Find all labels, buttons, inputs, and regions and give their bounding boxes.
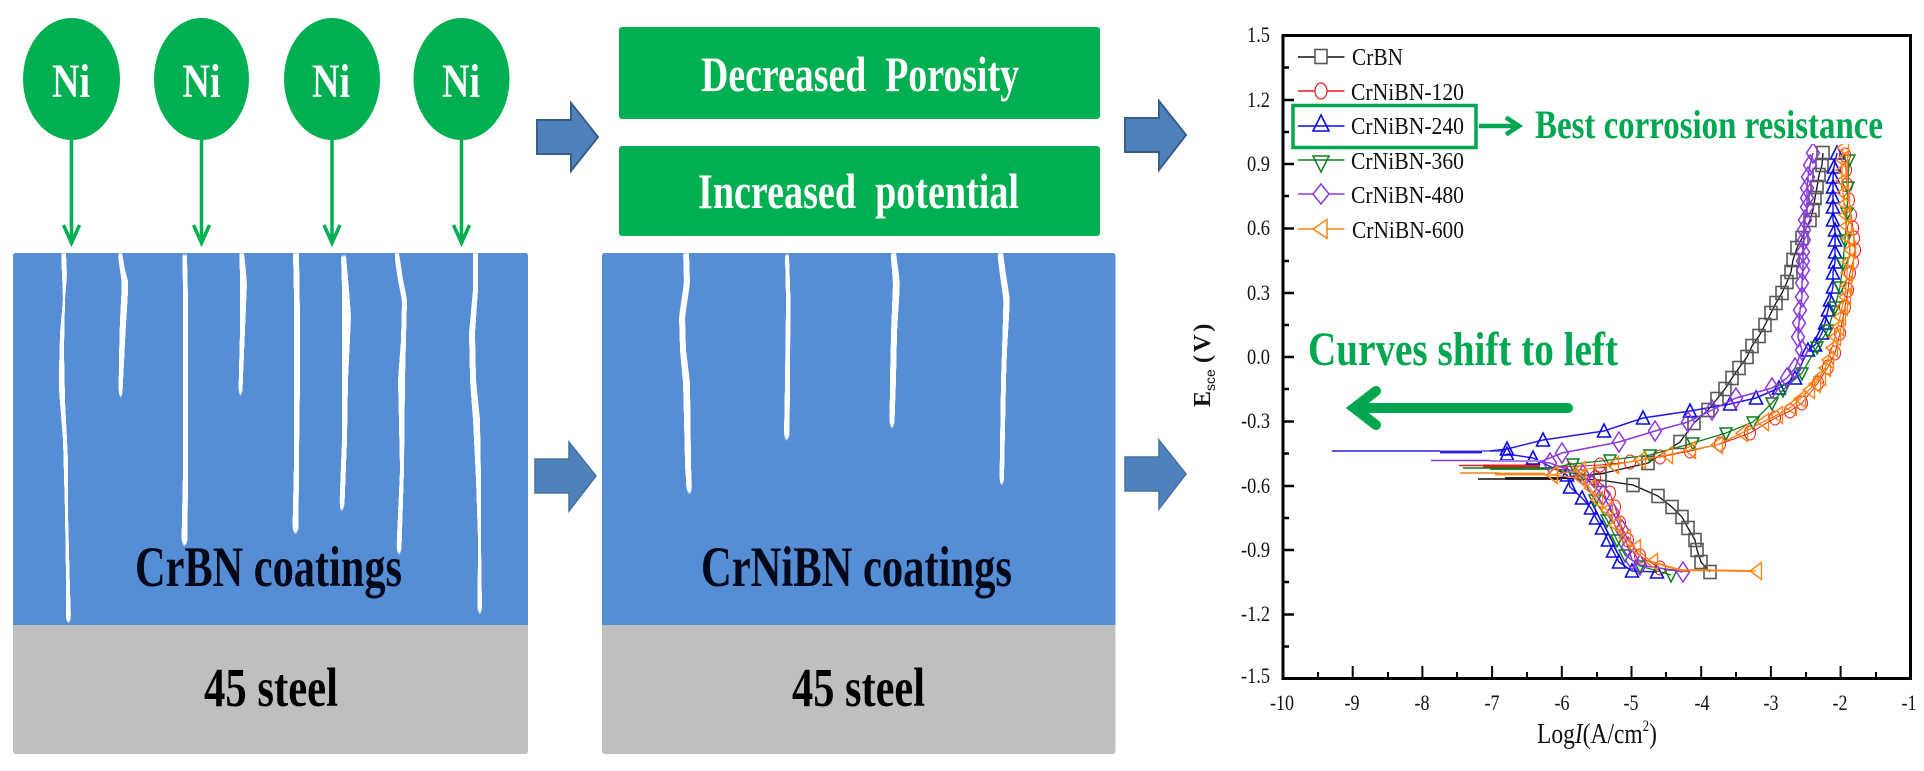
callout: curves shift to left: Curves shift to left xyxy=(1308,323,1618,376)
series: CrNiBN-120 xyxy=(1459,155,1855,572)
legend item: CrNiBN-600: CrNiBN-600 xyxy=(1352,218,1464,244)
highlight box around CrNiBN-240 xyxy=(1293,106,1476,148)
legend item: CrNiBN-360: CrNiBN-360 xyxy=(1351,149,1464,175)
y axis tick labels: -1.5 xyxy=(1241,663,1270,688)
x axis tick labels: -7 xyxy=(1484,690,1500,715)
y axis tick labels: 0.9 xyxy=(1247,151,1270,176)
arrow: Ni to decreased porosity xyxy=(537,103,598,171)
x axis tick labels: -2 xyxy=(1832,690,1848,715)
CrNiBN coating layer xyxy=(602,253,1116,625)
y axis tick labels: 0.3 xyxy=(1247,280,1270,305)
x axis title: LogI(A/cm xyxy=(1537,718,1657,750)
x axis tick labels: -6 xyxy=(1554,690,1570,715)
chart frame and ticks xyxy=(1283,36,1910,678)
y axis tick labels: 0.6 xyxy=(1247,215,1270,240)
x axis tick labels: -9 xyxy=(1344,690,1360,715)
Ni atom 1 with arrow: Ni xyxy=(52,55,90,108)
Ni atom 4 with arrow: Ni xyxy=(442,55,480,108)
x axis title: 2 xyxy=(1643,718,1649,735)
y axis tick labels: 0.0 xyxy=(1247,344,1270,369)
series: CrNiBN-480 xyxy=(1431,153,1813,572)
arrow: shift left xyxy=(1354,391,1568,425)
Ni atoms row xyxy=(23,18,510,243)
x axis tick labels: -5 xyxy=(1624,690,1638,715)
arrow: results to chart xyxy=(1125,101,1186,170)
Ni atom 4 with arrow xyxy=(414,18,510,243)
legend item: CrNiBN-480 xyxy=(1298,183,1464,209)
series: CrBN xyxy=(1478,153,1823,572)
label: 45 steel: 45 steel xyxy=(204,657,338,718)
arrow: highlight to callout xyxy=(1479,118,1519,134)
legend item: CrNiBN-120: CrNiBN-120 xyxy=(1351,80,1464,106)
y axis title: (V) xyxy=(1190,321,1216,363)
Ni atom 3 with arrow xyxy=(284,18,380,243)
y axis tick labels: 1.2 xyxy=(1247,87,1270,112)
series: CrNiBN-240 xyxy=(1332,153,1837,572)
polarization chart xyxy=(1190,22,1916,750)
result box: decreased porosity: Decreased Porosity xyxy=(701,46,1019,102)
legend item: CrBN: CrBN xyxy=(1352,45,1403,71)
Ni atom 1 with arrow xyxy=(23,18,120,243)
steel substrate layer xyxy=(13,620,528,754)
x axis tick labels: -3 xyxy=(1764,690,1778,715)
y axis title: E xyxy=(1190,391,1216,407)
legend item: CrNiBN-360 xyxy=(1298,149,1464,175)
y axis tick labels: -1.2 xyxy=(1241,601,1270,626)
arrow: CrNiBN to chart xyxy=(1125,440,1186,509)
y axis tick labels: -0.9 xyxy=(1241,537,1270,562)
x axis tick labels: -4 xyxy=(1694,690,1710,715)
panel: CrNiBN coating on steel xyxy=(602,253,1116,754)
result box: increased potential xyxy=(619,146,1100,236)
columnar pores in CrBN xyxy=(59,253,482,622)
label: CrBN coatings: CrBN coatings xyxy=(135,536,402,599)
result box: increased potential: Increased potential xyxy=(698,163,1019,219)
legend xyxy=(1298,45,1464,244)
x axis title: ) xyxy=(1649,718,1657,750)
y axis tick labels xyxy=(1241,22,1270,688)
legend item: CrNiBN-480: CrNiBN-480 xyxy=(1351,183,1464,209)
result box: decreased porosity xyxy=(619,27,1100,119)
series: CrNiBN-360 xyxy=(1463,160,1849,575)
Ni atom 3 with arrow: Ni xyxy=(312,55,350,108)
legend item: CrNiBN-120 xyxy=(1298,80,1464,106)
y axis tick labels: -0.6 xyxy=(1241,473,1270,498)
x axis tick labels xyxy=(1270,690,1916,715)
legend item: CrNiBN-600 xyxy=(1298,218,1464,244)
x axis tick labels: -1 xyxy=(1902,690,1916,715)
y axis title: sce xyxy=(1202,369,1218,391)
series: CrNiBN-600 xyxy=(1460,148,1850,571)
y axis tick labels: 1.5 xyxy=(1247,22,1270,47)
CrBN coating layer xyxy=(13,253,528,625)
y axis tick labels: -0.3 xyxy=(1241,408,1270,433)
label: 45 steel: 45 steel xyxy=(792,657,925,718)
reduced pores in CrNiBN xyxy=(679,253,1010,493)
x axis tick labels: -10 xyxy=(1270,690,1294,715)
steel substrate layer xyxy=(602,620,1116,754)
Ni atom 2 with arrow xyxy=(154,18,249,243)
legend item: CrBN xyxy=(1298,45,1403,71)
x axis tick labels: -8 xyxy=(1414,690,1430,715)
legend item: CrNiBN-240: CrNiBN-240 xyxy=(1351,114,1464,140)
label: CrNiBN coatings: CrNiBN coatings xyxy=(701,536,1012,599)
legend item: CrNiBN-240 xyxy=(1298,114,1464,140)
Ni atom 2 with arrow: Ni xyxy=(182,55,220,108)
panel: CrBN coating on steel xyxy=(13,253,528,754)
arrow: CrBN to CrNiBN xyxy=(535,442,596,511)
